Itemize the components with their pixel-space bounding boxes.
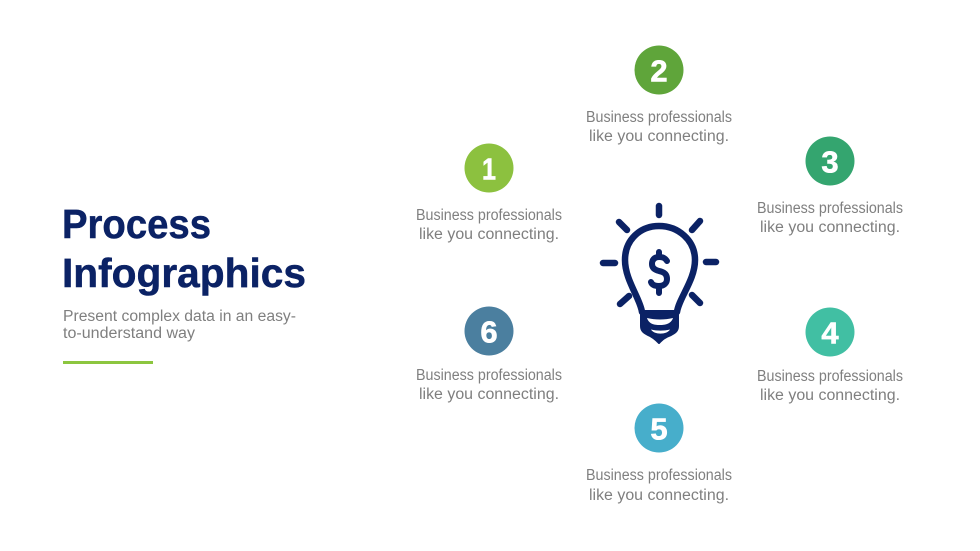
step 2: Business professionals [586,109,732,126]
step 3: Business professionals [757,200,903,217]
step 5: 5 [650,412,668,446]
step 1 badge [464,144,514,192]
step 5 [586,404,732,504]
subtitle: Present complex data in an easy- [63,308,296,325]
step 5: Business professionals [586,467,732,484]
step 6 badge [464,306,514,356]
title: Infographics [62,250,306,296]
step 2 badge [634,46,684,94]
step 1 [416,144,562,243]
step 1: 1 [482,152,496,186]
step 6: Business professionals [416,367,562,384]
step 4: like you connecting. [760,387,900,404]
subtitle: to-understand way [63,325,195,342]
icon: light bulb with dollar sign [603,206,716,343]
step 1: like you connecting. [419,226,559,243]
step 3: 3 [821,144,839,180]
step 4: Business professionals [757,368,903,385]
accent underline [63,361,153,364]
step 2 [586,46,732,145]
step 2: like you connecting. [589,128,729,145]
step 1: Business professionals [416,207,562,224]
step 3 badge [806,136,854,186]
step 6 [416,306,562,403]
step 6: like you connecting. [419,386,559,403]
step 5: like you connecting. [589,487,729,504]
title: Process [62,201,211,247]
subtitle [63,308,296,342]
step 2: 2 [650,54,668,88]
step 4 badge [806,308,854,356]
step 3: like you connecting. [760,219,900,236]
step 6: 6 [480,314,498,350]
step 4 [757,308,903,404]
step 5 badge [634,404,684,452]
step 4: 4 [821,316,839,350]
title [62,201,306,296]
step 3 [757,136,903,236]
